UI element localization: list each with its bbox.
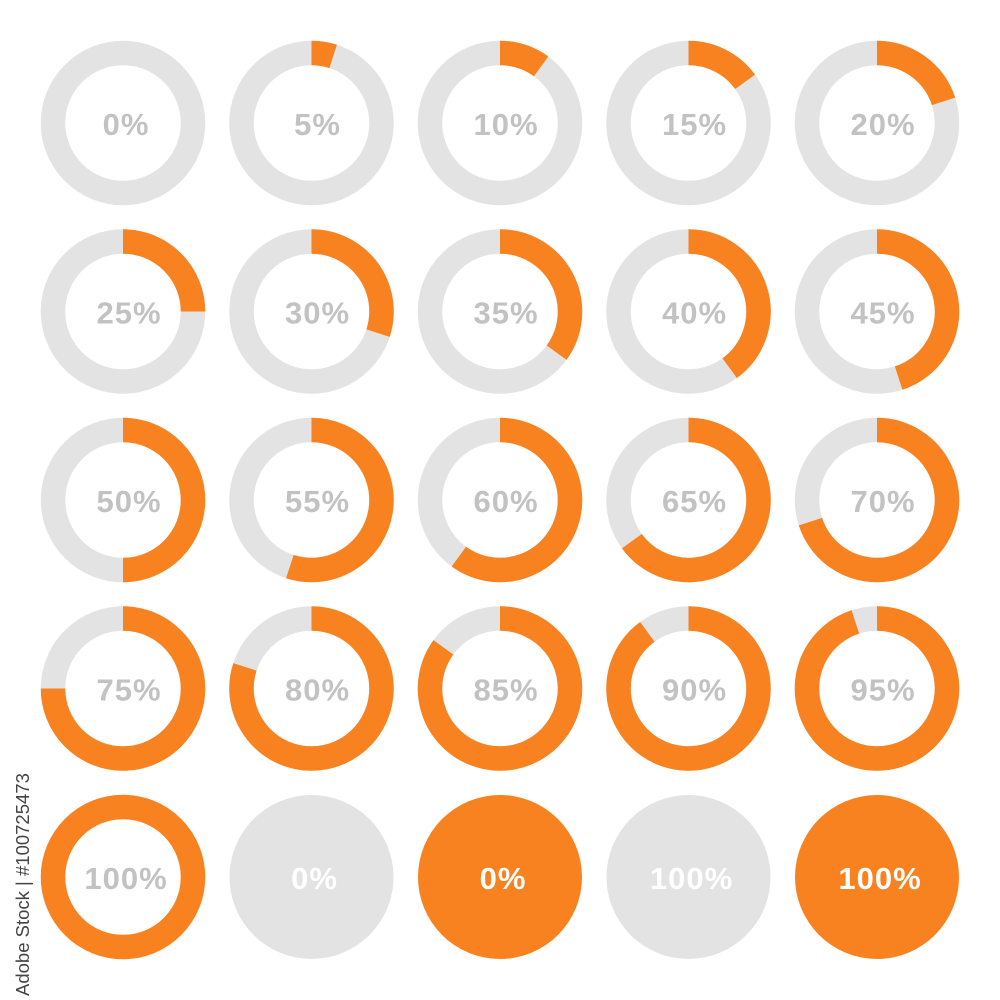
- chart: 25%: [53, 242, 193, 382]
- chart: 55%: [242, 430, 382, 570]
- chart: 50%: 50%: [96, 484, 162, 519]
- chart: 0%: [53, 53, 193, 193]
- chart: 35%: 35%: [473, 296, 539, 330]
- chart: 65%: [618, 430, 758, 570]
- chart: 95%: 95%: [850, 672, 916, 708]
- chart: 0%: 0%: [103, 107, 149, 142]
- chart: 90%: [618, 618, 758, 758]
- chart: 85%: [430, 618, 570, 758]
- chart: 30%: [242, 242, 382, 382]
- chart: 30%: 30%: [285, 296, 350, 330]
- chart: 65%: 65%: [662, 484, 727, 519]
- chart: 10%: [430, 53, 570, 193]
- chart: 100% ring: [53, 807, 193, 947]
- chart: 70%: 70%: [850, 484, 916, 519]
- chart: 0% filled orange: [418, 795, 582, 959]
- chart: 5%: 5%: [294, 107, 341, 142]
- chart: 80%: [241, 618, 382, 758]
- chart: 35%: [430, 242, 570, 382]
- chart: 5%: [242, 53, 382, 193]
- chart: 80%: 80%: [285, 672, 350, 708]
- chart: 70%: [807, 430, 947, 570]
- chart: 0% filled orange: 0%: [480, 861, 526, 896]
- chart: 20%: 20%: [850, 107, 916, 142]
- chart: 20%: [807, 53, 947, 193]
- chart: 15%: [618, 53, 758, 193]
- chart: 100% filled gray: 100%: [650, 861, 733, 896]
- chart: 95%: [807, 618, 947, 758]
- chart: 0% filled gray: 0%: [291, 861, 338, 896]
- chart: 40%: [618, 242, 759, 382]
- chart: 75%: 75%: [96, 672, 162, 708]
- chart: 55%: 55%: [285, 484, 350, 519]
- chart: 100% filled orange: [795, 795, 959, 959]
- chart: 45%: 45%: [850, 296, 916, 330]
- chart: 60%: 60%: [473, 484, 539, 519]
- chart: 85%: 85%: [473, 672, 539, 708]
- chart: 45%: [807, 242, 947, 382]
- chart: 100% filled gray: [606, 795, 770, 959]
- chart: 50%: [53, 430, 193, 570]
- chart: 40%: 40%: [662, 296, 727, 330]
- chart: 0% filled gray: [230, 795, 394, 959]
- chart: 25%: 25%: [96, 296, 162, 330]
- chart: 100% ring: 100%: [84, 861, 168, 896]
- chart: 75%: [53, 618, 193, 758]
- side credit text: Adobe Stock | #100725473: [12, 773, 33, 996]
- chart: 100% filled orange: 100%: [838, 861, 922, 896]
- chart: 60%: [430, 430, 570, 570]
- chart: 90%: 90%: [662, 672, 727, 708]
- chart: 15%: 15%: [662, 107, 727, 142]
- chart: 10%: 10%: [473, 107, 539, 142]
